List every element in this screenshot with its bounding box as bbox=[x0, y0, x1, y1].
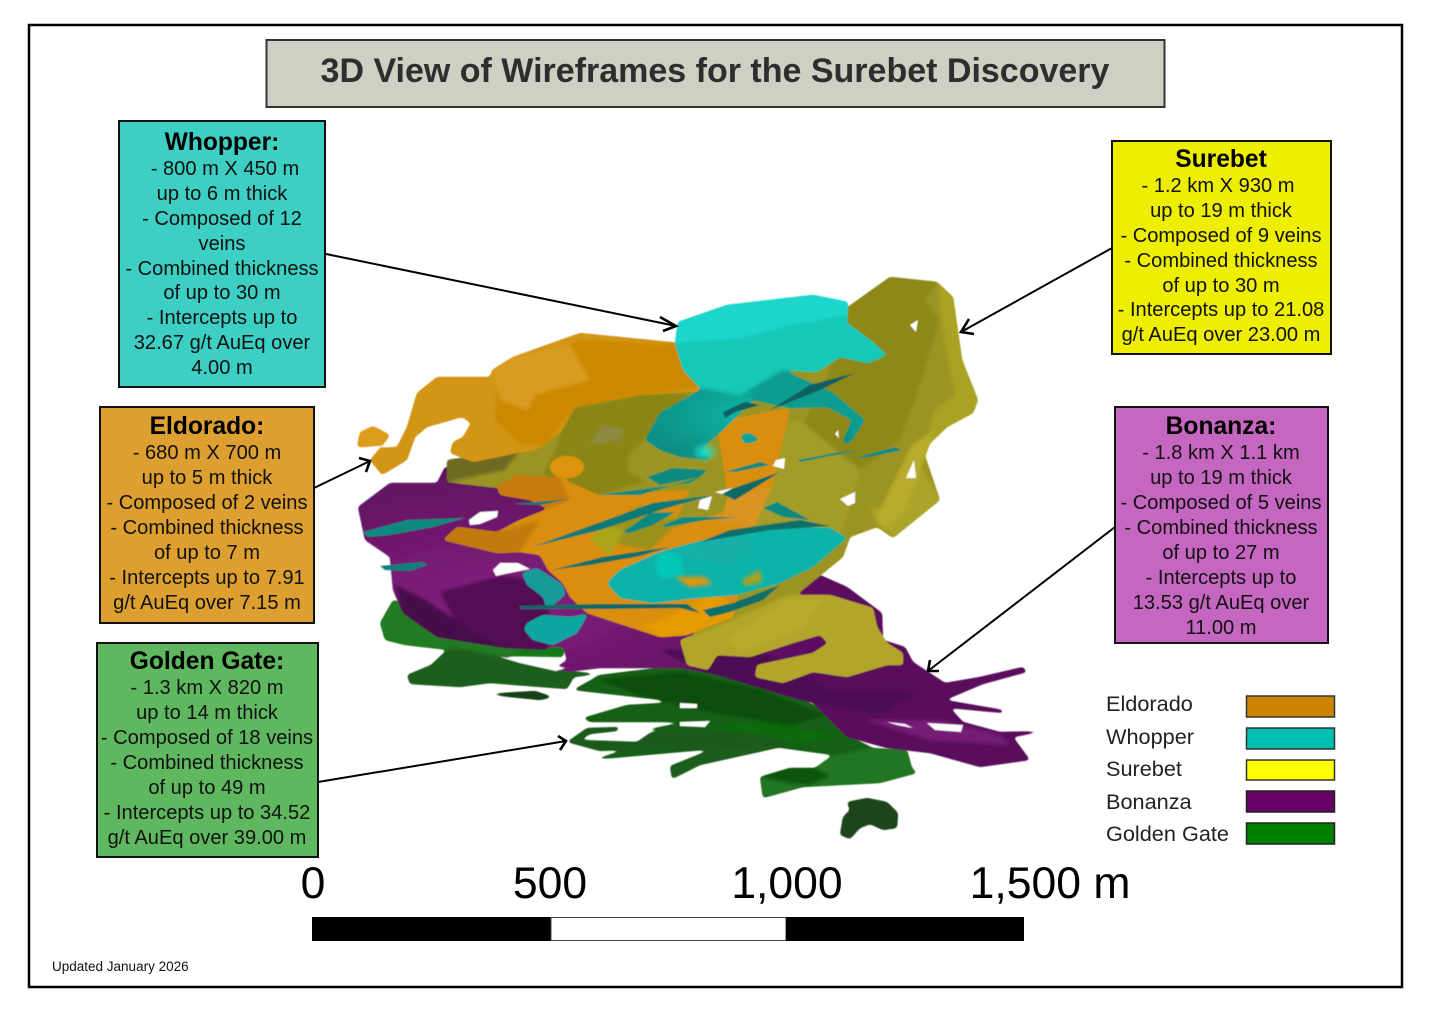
panel: Eldorado: Eldorado: bbox=[150, 413, 264, 440]
panel: Whopper: - Combined thickness bbox=[125, 258, 319, 280]
panel: Bonanza: - Composed of 5 veins bbox=[1120, 492, 1322, 514]
panel: Surebet: - Composed of 9 veins bbox=[1120, 225, 1322, 247]
scale bar: 500 bbox=[513, 859, 587, 908]
arrow: Surebet bbox=[961, 248, 1112, 334]
arrow: Whopper bbox=[326, 254, 676, 331]
panel: Eldorado bbox=[100, 407, 314, 623]
panel: Whopper: 32.67 g/t AuEq over bbox=[134, 332, 311, 354]
panel: Surebet: up to 19 m thick bbox=[1150, 200, 1293, 222]
title banner: 3D View of Wireframes for the Surebet Discovery bbox=[321, 52, 1110, 90]
panel: Whopper: 4.00 m bbox=[191, 357, 253, 379]
vein: Golden Gate bbox=[380, 570, 917, 839]
panel: Surebet: - Intercepts up to 21.08 bbox=[1118, 299, 1324, 321]
panel: Eldorado: - Composed of 2 veins bbox=[106, 492, 308, 514]
panel: Whopper: veins bbox=[199, 233, 245, 255]
panel: Golden Gate bbox=[97, 643, 318, 857]
panel: Bonanza: - Intercepts up to bbox=[1146, 567, 1296, 589]
panel: Golden Gate: of up to 49 m bbox=[148, 777, 266, 799]
scale bar: 1,000 bbox=[731, 859, 843, 908]
legend: Eldorado bbox=[1106, 691, 1193, 716]
panel: Bonanza: - Combined thickness bbox=[1124, 517, 1318, 539]
panel: Surebet bbox=[1112, 141, 1331, 354]
gaps in the wireframes bbox=[469, 320, 963, 732]
panel: Whopper: up to 6 m thick bbox=[157, 183, 288, 205]
panel: Whopper: - 800 m X 450 m bbox=[151, 158, 299, 180]
panel: Golden Gate: g/t AuEq over 39.00 m bbox=[108, 827, 306, 849]
panel: Bonanza: Bonanza: bbox=[1166, 413, 1276, 440]
panel: Whopper: - Composed of 12 bbox=[142, 208, 302, 230]
panel: Eldorado: of up to 7 m bbox=[154, 542, 260, 564]
arrow: Golden Gate bbox=[318, 736, 566, 782]
panel: Bonanza: of up to 27 m bbox=[1162, 542, 1280, 564]
scale bar bbox=[301, 859, 1130, 941]
scale bar: 0 bbox=[301, 859, 325, 908]
legend bbox=[1106, 691, 1334, 846]
panel: Eldorado: - Intercepts up to 7.91 bbox=[109, 567, 305, 589]
panel: Bonanza: 13.53 g/t AuEq over bbox=[1133, 592, 1310, 614]
vein: Surebet bbox=[447, 277, 978, 683]
title banner bbox=[266, 40, 1164, 107]
panel: Golden Gate: - Composed of 18 veins bbox=[101, 727, 313, 749]
panel: Bonanza bbox=[1115, 407, 1328, 643]
panel: Whopper: - Intercepts up to bbox=[147, 307, 297, 329]
panel: Surebet: g/t AuEq over 23.00 m bbox=[1122, 324, 1320, 346]
panel: Whopper: of up to 30 m bbox=[163, 282, 281, 304]
vein: Eldorado bbox=[357, 333, 790, 637]
legend: Surebet bbox=[1106, 756, 1182, 781]
footnote: Updated January 2026 bbox=[52, 959, 189, 974]
panel: Bonanza: - 1.8 km X 1.1 km bbox=[1142, 442, 1300, 464]
thin Whopper lenses bbox=[363, 373, 902, 617]
panel: Eldorado: - 680 m X 700 m bbox=[133, 442, 281, 464]
panel: Golden Gate: Golden Gate: bbox=[130, 648, 284, 675]
legend: Whopper bbox=[1106, 724, 1194, 749]
panel: Surebet: - Combined thickness bbox=[1124, 250, 1318, 272]
scale bar: 1,500 m bbox=[970, 859, 1130, 908]
panel: Surebet: - 1.2 km X 930 m bbox=[1142, 175, 1294, 197]
panel: Golden Gate: up to 14 m thick bbox=[136, 702, 279, 724]
panel: Eldorado: up to 5 m thick bbox=[142, 467, 273, 489]
arrow: Eldorado bbox=[314, 458, 370, 488]
legend: Bonanza bbox=[1106, 789, 1193, 814]
vein: Whopper bbox=[522, 295, 887, 645]
arrow: Bonanza bbox=[928, 527, 1115, 671]
panel: Whopper bbox=[119, 121, 325, 387]
3D wireframe model bbox=[357, 277, 1047, 839]
highlight on Whopper bbox=[691, 441, 719, 463]
panel: Golden Gate: - 1.3 km X 820 m bbox=[130, 677, 284, 699]
panel: Whopper: Whopper: bbox=[165, 129, 279, 156]
panel: Eldorado: g/t AuEq over 7.15 m bbox=[113, 592, 301, 614]
panel: Surebet: of up to 30 m bbox=[1162, 275, 1280, 297]
panel: Golden Gate: - Combined thickness bbox=[110, 752, 304, 774]
panel: Surebet: Surebet bbox=[1175, 146, 1267, 173]
vein: Bonanza bbox=[358, 465, 1047, 767]
panel: Bonanza: 11.00 m bbox=[1185, 617, 1257, 639]
panel: Bonanza: up to 19 m thick bbox=[1150, 467, 1293, 489]
panel: Golden Gate: - Intercepts up to 34.52 bbox=[104, 802, 310, 824]
legend: Golden Gate bbox=[1106, 821, 1229, 846]
panel: Eldorado: - Combined thickness bbox=[110, 517, 304, 539]
